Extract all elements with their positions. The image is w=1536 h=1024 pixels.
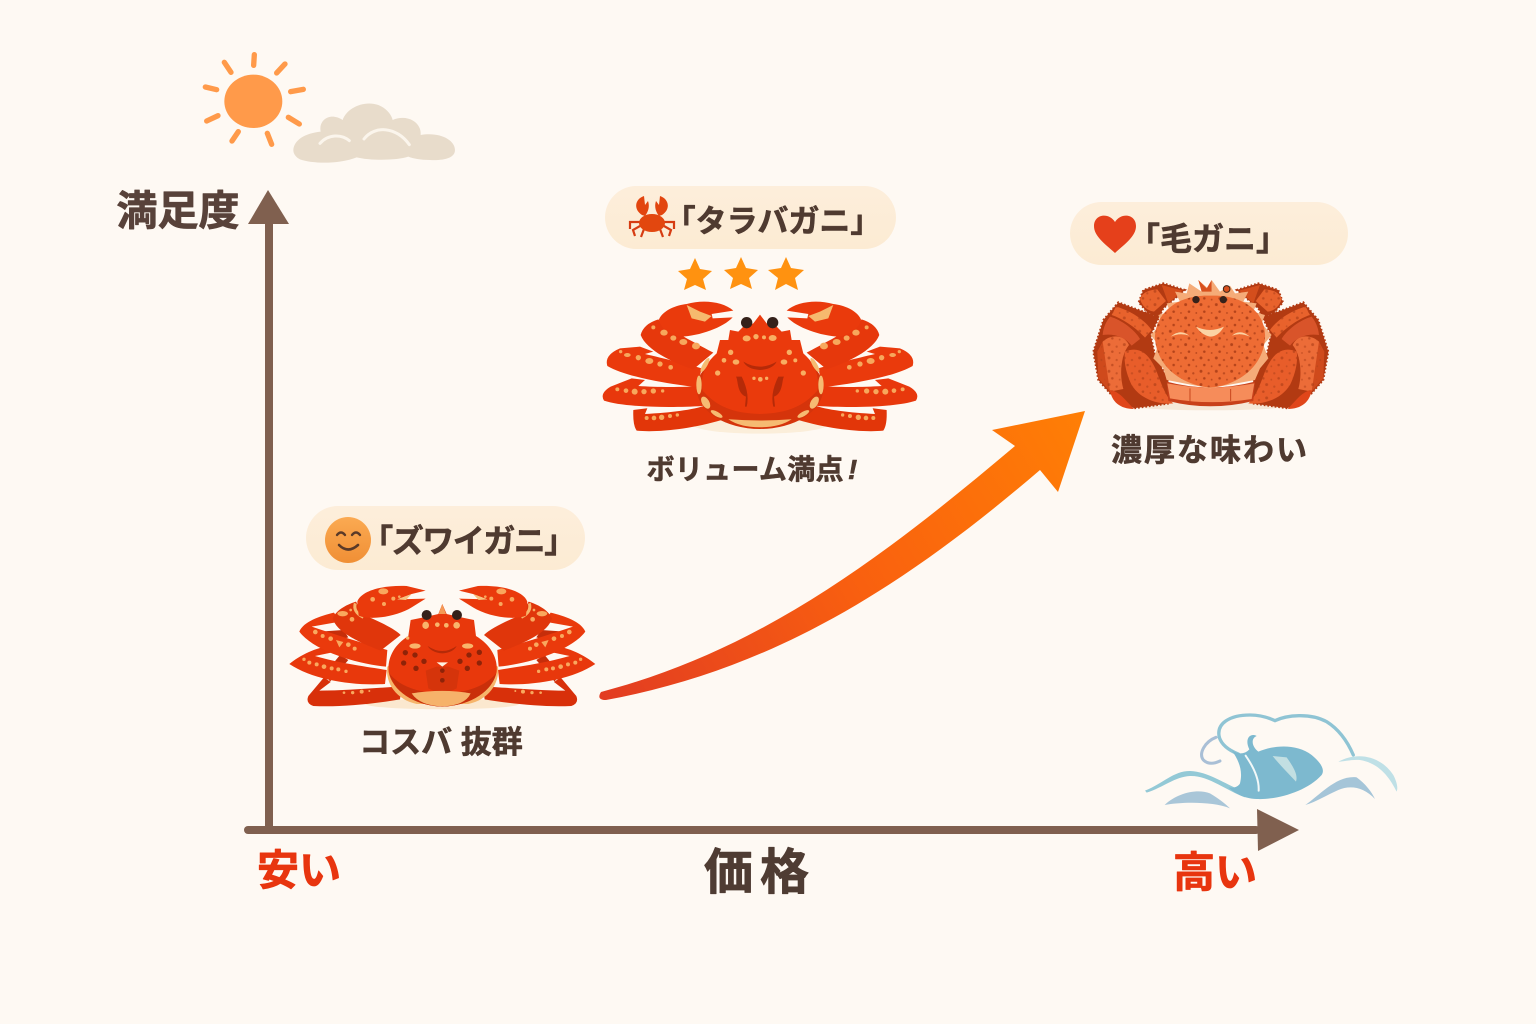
x axis high label: 高い <box>1173 849 1257 896</box>
x axis low label: 安い <box>257 847 341 894</box>
illustration: taraba crab <box>603 302 917 434</box>
crab name: 「タラバガニ」 <box>665 204 881 239</box>
x axis title: 価格 <box>704 846 816 900</box>
crab name: 「毛ガニ」 <box>1128 221 1288 257</box>
label pill <box>605 186 896 249</box>
caption: コスバ 抜群 <box>359 725 523 760</box>
crab name: 「ズワイガニ」 <box>361 523 575 559</box>
y axis title: 満足度 <box>116 188 240 234</box>
y axis arrow <box>248 190 289 832</box>
panel: zuwai crab <box>289 506 595 760</box>
icon: small crab <box>630 196 674 237</box>
caption: ボリューム満点! <box>647 454 857 485</box>
caption: 濃厚な味わい <box>1111 433 1309 468</box>
label pill <box>1070 202 1348 265</box>
growth arrow <box>599 411 1085 700</box>
panel: kegani crab <box>1070 202 1348 468</box>
illustration: zuwai crab <box>289 586 595 709</box>
icon: smile <box>325 517 371 563</box>
icon: cloud <box>293 104 455 163</box>
illustration: kegani crab <box>1093 280 1328 410</box>
icon: wave <box>1145 715 1397 808</box>
icon: rating stars <box>678 257 804 290</box>
label pill <box>306 506 585 570</box>
panel: taraba crab <box>603 186 917 485</box>
x axis arrow <box>244 809 1299 851</box>
icon: sun <box>205 55 303 144</box>
icon: heart <box>1094 216 1136 253</box>
